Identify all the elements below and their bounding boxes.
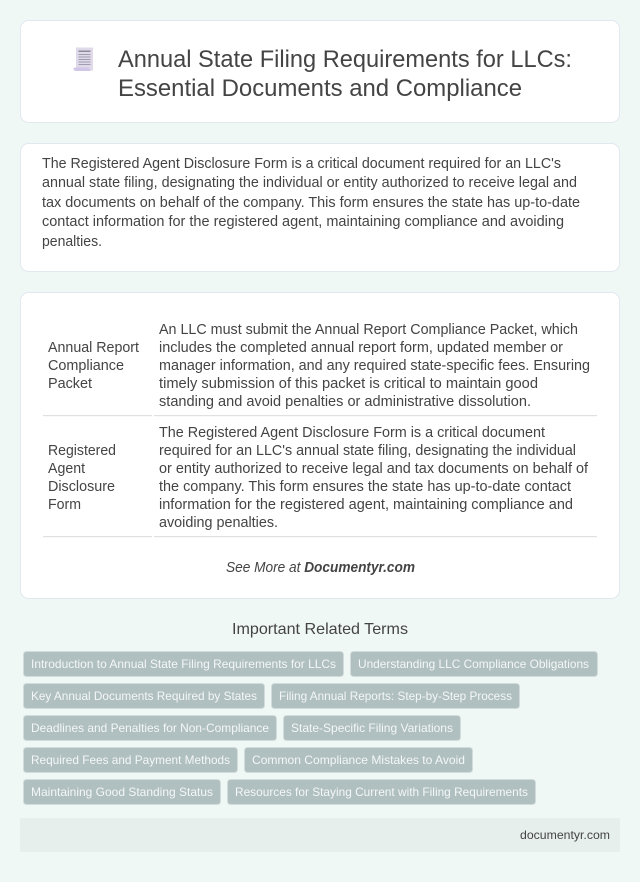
text block: introduction paragraph: The Registered Agent Disclosure Form is a critical document required for an LLC's bbox=[42, 156, 561, 172]
title: Essential Documents and Compliance bbox=[118, 75, 522, 102]
table row: Registered Agent Disclosure Form: avoiding penalties. bbox=[159, 515, 278, 531]
tag list: related terms: Resources for Staying Current with Filing Requirements bbox=[235, 785, 528, 799]
panel: documents table bbox=[20, 292, 620, 598]
tag list: related terms: State-Specific Filing Variations bbox=[291, 721, 453, 735]
table row: Registered Agent Disclosure Form: Disclosure bbox=[48, 479, 115, 495]
tag list: related terms: Understanding LLC Compliance Obligations bbox=[358, 657, 589, 671]
table row: Annual Report Compliance Packet: manager information, and any required state-specific fees. Ensuring bbox=[159, 358, 590, 374]
tag list: related terms: Maintaining Good Standing Status bbox=[31, 785, 213, 799]
title bbox=[118, 46, 572, 102]
table row: Annual Report Compliance Packet: standing and avoid penalties or administrative dissolution. bbox=[159, 394, 531, 410]
table row: Registered Agent Disclosure Form: required for an LLC's annual state filing, designating the individual bbox=[159, 443, 576, 459]
table row: Registered Agent Disclosure Form: the company. This form ensures the state has up-to-date contact bbox=[159, 479, 571, 495]
table row: Annual Report Compliance Packet: includes the completed annual report form, updated member or bbox=[159, 340, 563, 356]
panel: introduction bbox=[20, 144, 620, 272]
tag list: related terms: Required Fees and Payment Methods bbox=[31, 753, 230, 767]
table row: Registered Agent Disclosure Form: The Registered Agent Disclosure Form is a critical document bbox=[159, 425, 545, 441]
text block: introduction paragraph: annual state filing, designating the individual or entity authorized to receive legal and bbox=[42, 175, 577, 191]
tag list: related terms: Common Compliance Mistakes to Avoid bbox=[252, 753, 465, 767]
table row: Registered Agent Disclosure Form bbox=[43, 425, 597, 537]
heading: important related terms: Important Related Terms bbox=[232, 621, 408, 638]
table row: Annual Report Compliance Packet: timely submission of this packet is critical to maintain good bbox=[159, 376, 538, 392]
text block: introduction paragraph bbox=[42, 156, 580, 250]
panel: title header bbox=[20, 20, 620, 122]
table row: Annual Report Compliance Packet: An LLC must submit the Annual Report Compliance Packet, which bbox=[159, 322, 578, 338]
title: Annual State Filing Requirements for LLCs: bbox=[118, 46, 572, 73]
table row: Annual Report Compliance Packet: Compliance bbox=[48, 358, 124, 374]
table row: Registered Agent Disclosure Form: Registered bbox=[48, 443, 116, 459]
tag list: related terms: Filing Annual Reports: Step-by-Step Process bbox=[279, 689, 512, 703]
table row: Annual Report Compliance Packet: Packet bbox=[48, 376, 92, 392]
footer: documentyr.com bbox=[520, 828, 610, 842]
icon: document scroll bbox=[73, 48, 93, 71]
tag list: related terms: Key Annual Documents Required by States bbox=[31, 689, 257, 703]
table row: Annual Report Compliance Packet: Annual Report bbox=[48, 340, 139, 356]
text block: introduction paragraph: tax documents on behalf of the company. This form ensures the state has up-to-date bbox=[42, 195, 580, 211]
link: see more: See More at Documentyr.com bbox=[226, 560, 415, 576]
tag list: related terms bbox=[24, 652, 598, 804]
text block: introduction paragraph: penalties. bbox=[42, 234, 102, 250]
tag list: related terms: Deadlines and Penalties for Non-Compliance bbox=[31, 721, 269, 735]
table row: Registered Agent Disclosure Form: information for the registered agent, maintaining compliance and bbox=[159, 497, 573, 513]
tag list: related terms: Introduction to Annual State Filing Requirements for LLCs bbox=[31, 657, 336, 671]
table row: Annual Report Compliance Packet bbox=[43, 322, 597, 416]
footer bbox=[20, 818, 620, 852]
table row: Registered Agent Disclosure Form: Agent bbox=[48, 461, 85, 477]
text block: introduction paragraph: contact information for the registered agent, maintaining compliance and avoiding bbox=[42, 214, 564, 230]
table row: Registered Agent Disclosure Form: Form bbox=[48, 497, 81, 513]
table row: Registered Agent Disclosure Form: or entity authorized to receive legal and tax documents on behalf of bbox=[159, 461, 589, 477]
